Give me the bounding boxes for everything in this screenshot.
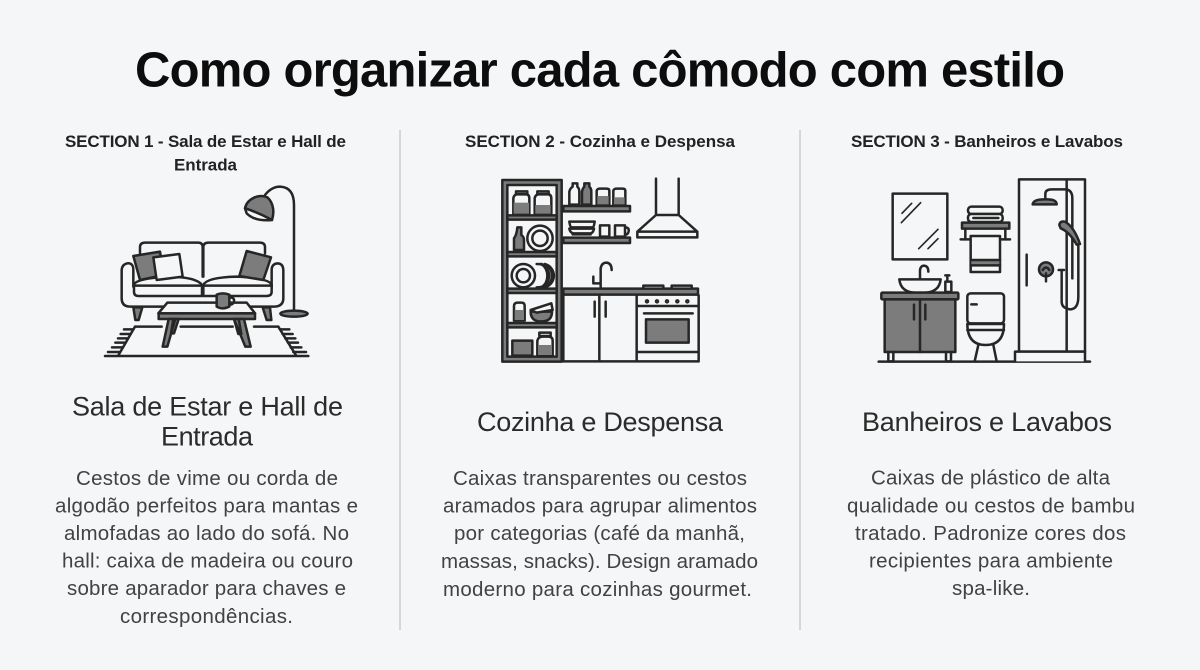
section label 2: SECTION 2 - Cozinha e Despensa [465, 132, 736, 151]
icon: bathroom with mirror, vanity, toilet and shower [879, 179, 1090, 362]
text block 1: algodão perfeitos para mantas e [55, 494, 358, 518]
heading: Sala de Estar e Hall de Entrada [72, 392, 343, 452]
text block 2: massas, snacks). Design aramado [441, 550, 758, 573]
icon: living room with sofa, lamp and table [105, 187, 308, 356]
text block 1: hall: caixa de madeira ou couro [62, 550, 353, 572]
text block 3: qualidade ou cestos de bambu [847, 494, 1135, 518]
text block 1: Cestos de vime ou corda de [76, 467, 338, 490]
text block 3: recipientes para ambiente [869, 550, 1113, 572]
text block 2 [441, 467, 758, 601]
title: Como organizar cada cômodo com estilo [135, 44, 1065, 98]
section label 3: SECTION 3 - Banheiros e Lavabos [851, 132, 1123, 151]
section label 1 [65, 132, 346, 174]
text block 3 [847, 466, 1135, 600]
text block 3: spa-like. [952, 577, 1030, 600]
text block 2: moderno para cozinhas gourmet. [443, 578, 752, 601]
panel: banheiro [847, 132, 1135, 600]
section label 1: SECTION 1 - Sala de Estar e Hall de [65, 132, 346, 151]
text block 1: correspondências. [120, 605, 293, 628]
heading: Sala de Estar e Hall de Entrada: Sala de Estar e Hall de [72, 392, 343, 422]
heading: Sala de Estar e Hall de Entrada: Entrada [161, 422, 254, 452]
section label 1: Entrada [174, 156, 238, 174]
text block 2: aramados para agrupar alimentos [443, 494, 757, 518]
text block 1: sobre aparador para chaves e [67, 577, 346, 600]
heading: Banheiros e Lavabos: Banheiros e Lavabos [862, 407, 1112, 437]
text block 3: tratado. Padronize cores dos [855, 522, 1126, 545]
icon: kitchen with shelves, hood and oven [502, 179, 699, 362]
text block 3: Caixas de plástico de alta [871, 466, 1111, 490]
panel: cozinha [441, 132, 758, 601]
panel: sala de estar [55, 132, 358, 628]
text block 2: Caixas transparentes ou cestos [453, 467, 747, 490]
text block 1: almofadas ao lado do sofá. No [64, 522, 349, 545]
text block 2: por categorias (café da manhã, [454, 522, 745, 545]
heading: Cozinha e Despensa: Cozinha e Despensa [477, 407, 724, 437]
text block 1 [55, 467, 358, 628]
